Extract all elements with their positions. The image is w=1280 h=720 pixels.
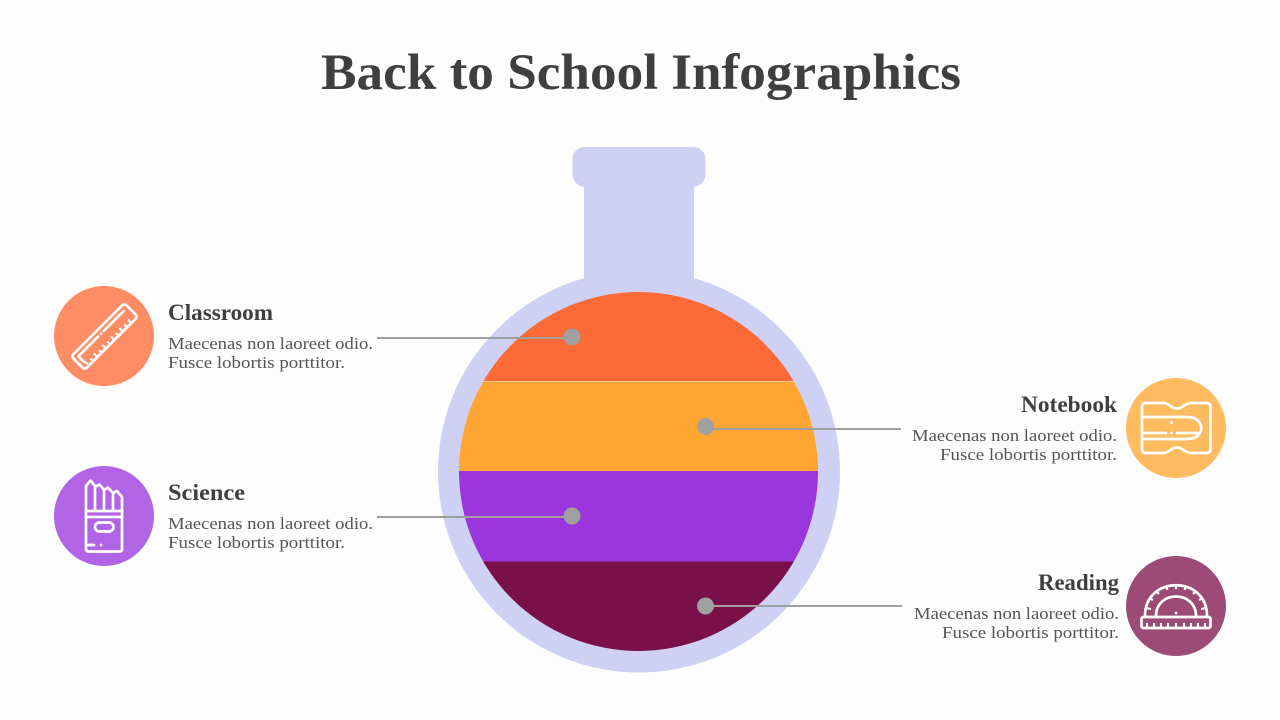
text: classroom: Maecenas non laoreet odio.	[168, 334, 373, 353]
icon: pencil box	[54, 466, 154, 566]
panel: science	[54, 466, 373, 566]
panel: reading	[914, 556, 1226, 656]
heading: notebook: Notebook	[1021, 392, 1117, 417]
heading: reading: Reading	[1038, 570, 1119, 595]
text: reading: Maecenas non laoreet odio.	[914, 604, 1119, 623]
connector: science	[377, 508, 580, 524]
text: science: Fusce lobortis porttitor.	[168, 533, 345, 552]
icon: ruler	[54, 286, 154, 386]
text: science: Maecenas non laoreet odio.	[168, 514, 373, 533]
connector: notebook	[697, 418, 901, 435]
panel: notebook	[912, 378, 1226, 478]
connector: classroom	[377, 328, 580, 346]
icon: sharpener	[1126, 378, 1226, 478]
flask diagram	[438, 147, 840, 672]
text: classroom: Fusce lobortis porttitor.	[168, 353, 345, 372]
title: Back to School Infographics	[321, 45, 961, 101]
text: reading: Fusce lobortis porttitor.	[942, 623, 1119, 642]
icon: protractor	[1126, 556, 1226, 656]
text: notebook: Maecenas non laoreet odio.	[912, 426, 1117, 445]
connector: reading	[697, 598, 902, 614]
panel: classroom	[54, 286, 373, 386]
text: notebook: Fusce lobortis porttitor.	[940, 445, 1117, 464]
flask liquid bands	[455, 290, 823, 654]
flask body	[438, 147, 840, 672]
heading: science: Science	[168, 480, 245, 505]
heading: classroom: Classroom	[168, 300, 273, 325]
